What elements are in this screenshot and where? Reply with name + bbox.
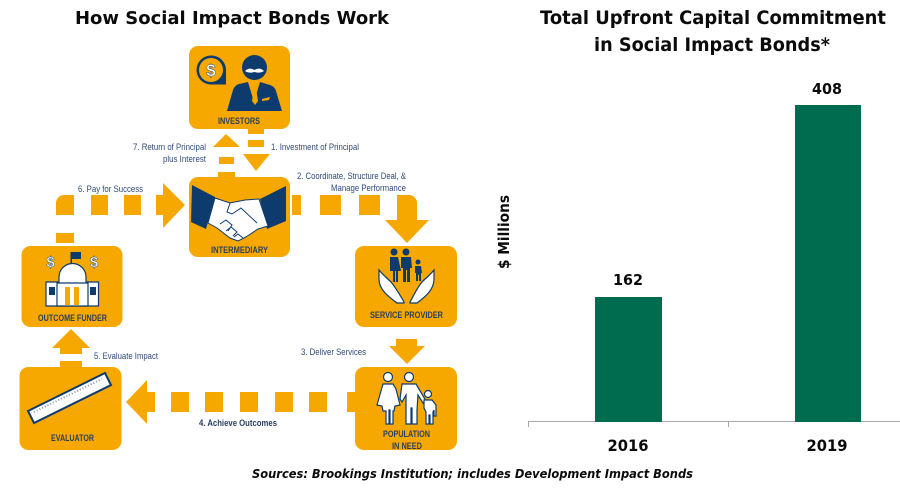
icon: investor with money speech bubble: $ xyxy=(206,61,216,80)
label: intermediary: INTERMEDIARY xyxy=(211,245,269,256)
arrow: return of principal, up to investors xyxy=(213,134,240,177)
node: investors xyxy=(189,46,290,129)
bar chart: capital commitment xyxy=(495,80,900,455)
label: population in need xyxy=(383,429,430,452)
step labels: plus Interest xyxy=(163,154,206,165)
icon: family of three xyxy=(377,372,436,424)
node: outcome funder xyxy=(22,246,122,327)
step labels: 5. Evaluate Impact xyxy=(94,351,158,362)
label: population in need: IN NEED xyxy=(392,441,422,452)
label: evaluator: EVALUATOR xyxy=(51,433,94,444)
step labels: Manage Performance xyxy=(331,183,406,194)
x axis xyxy=(528,422,900,427)
node: population in need xyxy=(355,367,457,452)
heading: total upfront capital commitment: in Social Impact Bonds* xyxy=(594,34,830,56)
icon: hands holding family xyxy=(379,248,434,303)
icon: government building: $ xyxy=(90,254,99,271)
step labels xyxy=(78,142,407,429)
node: service provider xyxy=(355,246,457,327)
arrow: deliver services xyxy=(389,339,425,364)
step labels: 6. Pay for Success xyxy=(78,184,143,195)
node: evaluator xyxy=(20,367,122,450)
label: service provider: SERVICE PROVIDER xyxy=(370,310,443,321)
arrow: achieve outcomes xyxy=(126,380,355,424)
node: intermediary xyxy=(189,177,290,257)
label: outcome funder: OUTCOME FUNDER xyxy=(38,313,107,324)
bar: 2016 xyxy=(595,297,662,422)
bar: 2019 xyxy=(795,105,861,422)
heading: total upfront capital commitment: Total Upfront Capital Commitment xyxy=(540,7,886,29)
source note: Sources: Brookings Institution; includes Development Impact Bonds xyxy=(252,467,693,481)
icon: government building: $ xyxy=(46,254,55,271)
step labels: 2. Coordinate, Structure Deal, & xyxy=(297,171,407,182)
label: investors: INVESTORS xyxy=(218,116,260,127)
arrow: coordinate to service provider xyxy=(292,195,429,243)
heading: total upfront capital commitment xyxy=(540,7,886,56)
panel: social impact bond flow diagram xyxy=(20,46,457,452)
icon: government building xyxy=(46,252,99,306)
category: 2016: 2016 xyxy=(608,436,648,455)
icon: handshake xyxy=(191,185,286,241)
category: 2019: 2019 xyxy=(806,436,848,455)
value: 408: 408 xyxy=(812,80,842,98)
step labels: 3. Deliver Services xyxy=(301,347,366,358)
heading: how social impact bonds work: How Social Impact Bonds Work xyxy=(75,8,390,29)
value: 162: 162 xyxy=(613,271,643,289)
arrow: pay for success xyxy=(56,183,185,243)
label: population in need: POPULATION xyxy=(383,429,430,440)
step labels: 1. Investment of Principal xyxy=(271,142,359,153)
icon: ruler xyxy=(28,373,111,423)
arrow: investment of principal, down to intermediary xyxy=(243,129,270,171)
step labels: 4. Achieve Outcomes xyxy=(199,418,277,429)
arrow: evaluate impact xyxy=(52,329,90,367)
axis title: $ Millions xyxy=(495,195,513,269)
step labels: 7. Return of Principal xyxy=(133,142,206,153)
